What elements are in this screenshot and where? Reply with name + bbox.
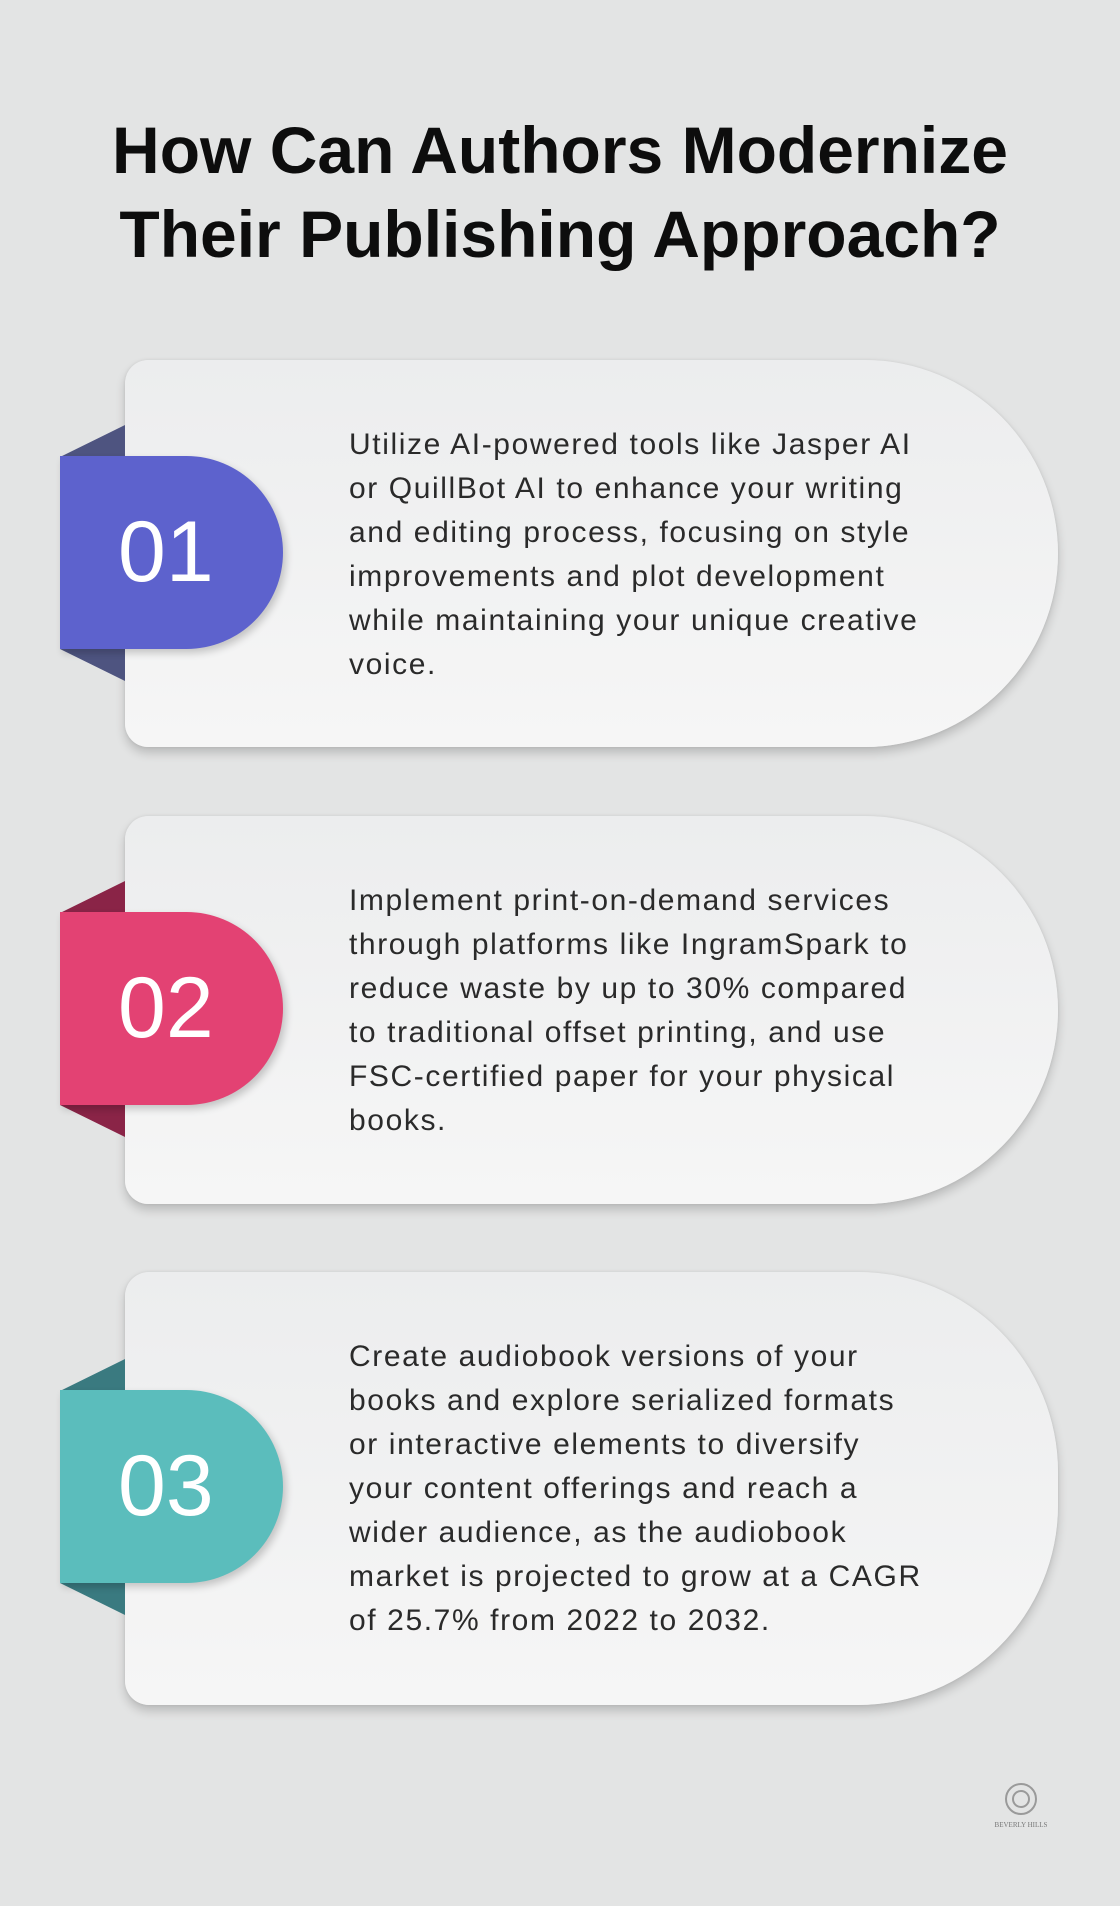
number tab 01 [60, 456, 283, 649]
text 3: or interactive elements to diversify [349, 1428, 860, 1461]
card 2 [125, 816, 1058, 1204]
panel: step 1 [60, 359, 1062, 757]
text 3 [349, 1340, 922, 1637]
logo: BEVERLY HILLS [995, 1821, 1047, 1829]
text 2: through platforms like IngramSpark to [349, 928, 908, 961]
text 1: improvements and plot development [349, 560, 885, 593]
fold bottom 2 [60, 1105, 125, 1137]
number tab 01: 01 [118, 504, 214, 600]
text 1: voice. [349, 648, 437, 681]
text 2: to traditional offset printing, and use [349, 1016, 886, 1049]
text 1 [349, 428, 918, 681]
fold top 3 [62, 1359, 125, 1390]
card 3 [125, 1272, 1058, 1705]
text 1: Utilize AI-powered tools like Jasper AI [349, 428, 912, 461]
number tab 03: 03 [118, 1438, 214, 1534]
text 3: market is projected to grow at a CAGR [349, 1560, 922, 1593]
fold bottom 1 [60, 649, 125, 681]
text 2: FSC-certified paper for your physical [349, 1060, 895, 1093]
text 3: of 25.7% from 2022 to 2032. [349, 1604, 771, 1637]
panel: step 3 [60, 1271, 1062, 1715]
text 1: while maintaining your unique creative [349, 604, 918, 637]
text 1: and editing process, focusing on style [349, 516, 910, 549]
title: Their Publishing Approach? [119, 197, 1001, 271]
text 2: books. [349, 1104, 447, 1137]
text 2 [349, 884, 908, 1137]
panel: step 2 [60, 815, 1062, 1214]
text 3: your content offerings and reach a [349, 1472, 858, 1505]
text 2: Implement print-on-demand services [349, 884, 890, 917]
text 3: books and explore serialized formats [349, 1384, 895, 1417]
fold bottom 3 [60, 1583, 125, 1615]
title [112, 113, 1008, 271]
logo [994, 1783, 1047, 1829]
title: How Can Authors Modernize [112, 113, 1008, 187]
card 1 [125, 360, 1058, 747]
fold top 2 [62, 881, 125, 912]
text 3: wider audience, as the audiobook [349, 1516, 847, 1549]
text 2: reduce waste by up to 30% compared [349, 972, 907, 1005]
number tab 02: 02 [118, 960, 214, 1056]
text 3: Create audiobook versions of your [349, 1340, 859, 1373]
number tab 03 [60, 1390, 283, 1583]
fold top 1 [62, 425, 125, 456]
text 1: or QuillBot AI to enhance your writing [349, 472, 903, 505]
number tab 02 [60, 912, 283, 1105]
